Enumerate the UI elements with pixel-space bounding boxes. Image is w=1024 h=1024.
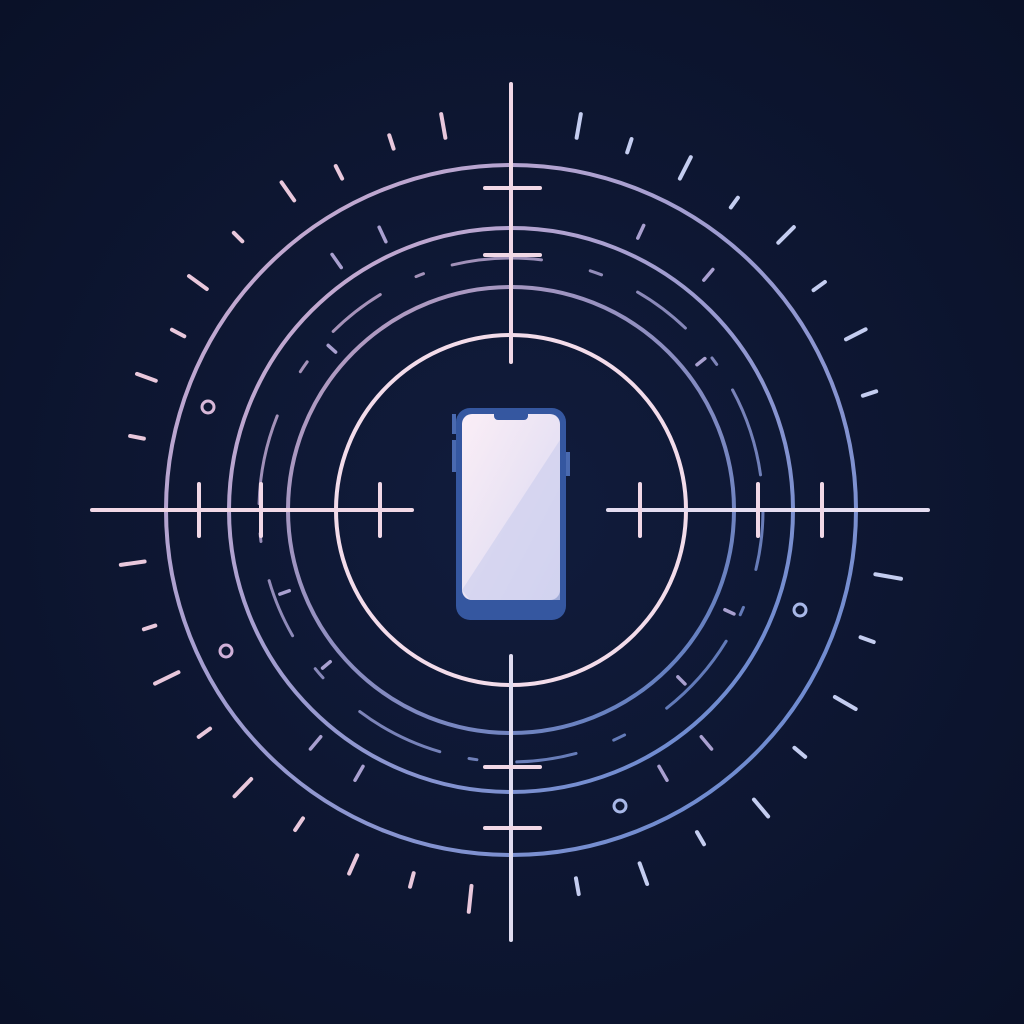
crosshair [92,84,928,940]
dashed arc ring [259,258,763,762]
inner circle [336,335,686,685]
small circle markers [202,401,806,812]
phone [452,408,570,620]
outer rings [166,165,856,855]
inner small dashes between rings [280,225,734,780]
radial dashes outer [121,114,901,912]
